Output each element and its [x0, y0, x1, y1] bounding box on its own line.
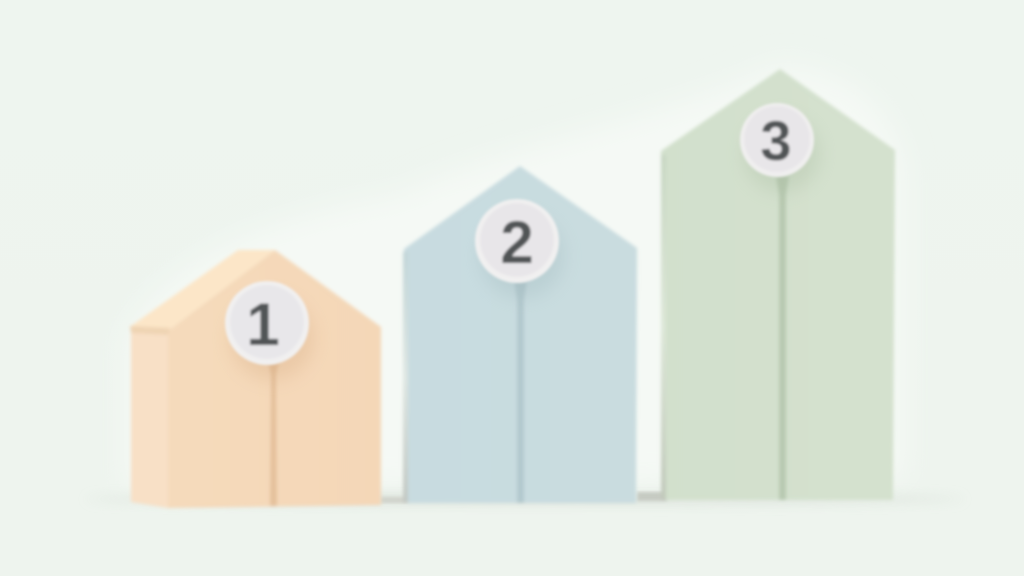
house 3: green	[661, 69, 895, 500]
gap shadows	[380, 492, 667, 503]
badge shadows	[230, 116, 820, 380]
number badge 3	[740, 103, 814, 177]
house 2 body	[404, 166, 637, 503]
house 1 centre seam	[268, 362, 279, 506]
house 3 body	[661, 69, 895, 500]
house 1 roof side	[131, 250, 275, 331]
house 1: orange	[130, 250, 381, 508]
house 2: blue	[403, 166, 637, 503]
house 3 left edge	[661, 155, 666, 499]
number badge 1: 1	[246, 291, 280, 358]
house 3 centre seam	[776, 176, 789, 500]
house 1 body	[168, 250, 381, 508]
background glow	[125, 65, 905, 490]
number badge 3: 3	[760, 109, 792, 172]
number badge 1	[225, 281, 309, 365]
house 1 eave	[130, 326, 170, 335]
house 1 side wall	[131, 331, 168, 508]
number badge 2: 2	[500, 209, 534, 276]
number badge 2	[475, 199, 559, 283]
house 2 left edge	[403, 252, 408, 502]
house 2 centre seam	[514, 280, 527, 503]
ground shadow	[85, 495, 965, 503]
